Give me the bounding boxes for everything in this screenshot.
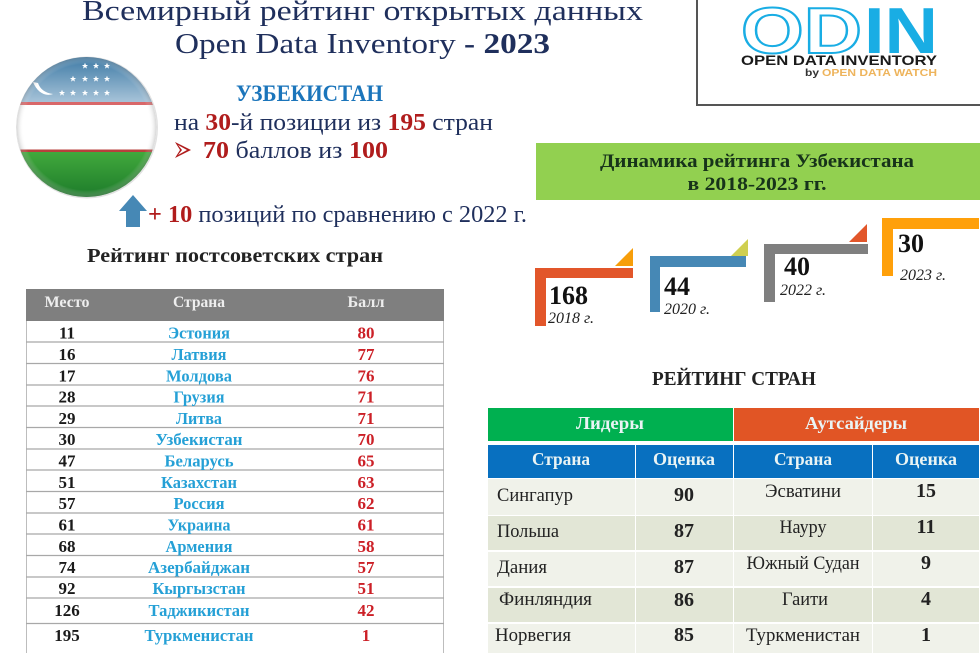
logo: ODIN: OPEN DATA INVENTORY (741, 53, 937, 68)
logo: ODIN: by (805, 68, 820, 79)
row: Норвегия / Туркменистан: Норвегия (495, 626, 571, 646)
header: outsiders (734, 408, 979, 441)
row: Казахстан: 51 (58, 473, 76, 492)
row: Эстония: 11 (59, 324, 75, 342)
step: 2018 (535, 248, 633, 327)
row: Дания / Южный Судан: Дания (497, 558, 547, 578)
icon: up arrow (119, 195, 147, 227)
row: Узбекистан: 70 (358, 430, 374, 449)
row: Таджикистан: 126 (54, 601, 80, 620)
step: 2022: 40 (784, 252, 810, 281)
panel: dynamics banner: в 2018-2023 гг. (688, 174, 826, 195)
row: Россия: 62 (358, 494, 374, 513)
row: Кыргызстан: 51 (358, 579, 374, 598)
table header: Балл (348, 294, 385, 311)
row: Армения: 68 (58, 537, 76, 556)
country heading: УЗБЕКИСТАН (236, 81, 383, 106)
row: Узбекистан: Узбекистан (156, 430, 243, 449)
header: leaders (488, 408, 733, 441)
table header: Место (44, 294, 90, 311)
row: Польша / Науру: 87 (674, 520, 694, 542)
row: Туркменистан (54, 626, 370, 645)
row: Финляндия / Гаити: Гаити (782, 590, 828, 610)
row: Эстония: 80 (358, 324, 374, 342)
row: Литва: 29 (58, 409, 76, 428)
row: Туркменистан: Туркменистан (144, 626, 254, 645)
row: Беларусь: 65 (358, 452, 374, 470)
row: Армения (58, 537, 374, 556)
row: Латвия: 16 (58, 345, 76, 364)
row: Азербайджан: Азербайджан (148, 558, 251, 577)
row: Таджикистан: 42 (358, 601, 374, 620)
row: Латвия: 77 (358, 345, 375, 364)
row: Норвегия / Туркменистан: 1 (921, 624, 931, 646)
row: Молдова: 17 (58, 366, 76, 386)
row: Грузия: 28 (58, 388, 76, 406)
row: Сингапур / Эсватини: 15 (916, 480, 936, 502)
step: 2018: 2018 г. (548, 310, 594, 327)
step: 2020: 2020 г. (664, 301, 710, 318)
row: Норвегия / Туркменистан: Туркменистан (746, 626, 860, 646)
row: Россия: Россия (174, 494, 225, 513)
row: Украина: 61 (358, 516, 374, 534)
header: leaders: Лидеры (576, 413, 644, 433)
row: Украина (58, 516, 374, 534)
row: Казахстан: Казахстан (161, 473, 237, 492)
row: Латвия (58, 345, 375, 364)
row: Грузия: 71 (358, 388, 374, 406)
row: Армения: 58 (358, 537, 374, 556)
row: Россия (58, 494, 374, 513)
header: outsiders: Аутсайдеры (805, 413, 907, 433)
table: leaders and outsiders (488, 408, 979, 653)
row: Польша / Науру: 11 (917, 516, 935, 538)
step: 2018: 168 (549, 281, 588, 310)
row: Дания / Южный Судан: Южный Судан (746, 554, 860, 574)
row: Азербайджан: 57 (358, 558, 375, 577)
row: Дания / Южный Судан (488, 552, 979, 586)
score text: 70 баллов из 100 (203, 138, 388, 164)
header: columns (488, 445, 979, 478)
row: Норвегия / Туркменистан: 85 (674, 624, 694, 646)
table header (26, 289, 444, 321)
row: Норвегия / Туркменистан (488, 624, 979, 653)
row: Туркменистан: 195 (54, 626, 80, 645)
row: Финляндия / Гаити: 86 (674, 589, 694, 611)
heading: country ranking: РЕЙТИНГ СТРАН (652, 368, 816, 390)
row: Сингапур / Эсватини (488, 479, 979, 515)
panel: dynamics banner (536, 143, 980, 200)
change text: + 10 позиций по сравнению с 2022 г. (148, 202, 527, 228)
row: Казахстан (58, 473, 374, 492)
row: Таджикистан (54, 601, 374, 620)
row: Армения: Армения (166, 537, 233, 556)
row: Россия: 57 (58, 494, 76, 513)
heading: post-Soviet ranking: Рейтинг постсоветских стран (87, 245, 383, 267)
row: Таджикистан: Таджикистан (148, 601, 250, 620)
row: Литва: Литва (176, 409, 222, 428)
row: Кыргызстан (58, 579, 374, 598)
step: 2020: 44 (664, 272, 690, 301)
row: Азербайджан: 74 (58, 558, 76, 577)
row: Финляндия / Гаити (488, 588, 979, 622)
row: Финляндия / Гаити: 4 (921, 588, 931, 610)
header: columns: Оценка (895, 449, 957, 469)
title: Open Data Inventory - 2023 (175, 28, 550, 60)
panel: dynamics banner: Динамика рейтинга Узбекистана (600, 151, 915, 172)
header: columns: Страна (774, 449, 832, 469)
row: Литва (58, 409, 374, 428)
row: Польша / Науру (488, 516, 979, 550)
row: Кыргызстан: Кыргызстан (152, 579, 246, 598)
header: columns: Страна (532, 449, 590, 469)
row: Дания / Южный Судан: 87 (674, 556, 694, 578)
position text: на 30-й позиции из 195 стран (174, 110, 493, 136)
row: Сингапур / Эсватини: Эсватини (765, 482, 841, 502)
row: Беларусь: Беларусь (164, 452, 234, 470)
row: Грузия (58, 388, 374, 406)
title (82, 0, 644, 60)
row: Эстония (59, 324, 374, 342)
row: Узбекистан: 30 (58, 430, 76, 449)
row: Грузия: Грузия (174, 388, 225, 406)
row: Украина: 61 (58, 516, 76, 534)
step: 2022 (764, 224, 868, 302)
step: 2020 (650, 239, 748, 318)
icon: Uzbekistan flag sphere (16, 56, 158, 198)
row: Беларусь: 47 (58, 452, 76, 470)
step: 2023: 30 (898, 229, 924, 258)
row: Кыргызстан: 92 (58, 579, 76, 598)
logo: ODIN (697, 0, 980, 105)
row: Сингапур / Эсватини: 90 (674, 484, 694, 506)
row: Сингапур / Эсватини: Сингапур (497, 486, 573, 506)
row: Украина: Украина (168, 516, 230, 534)
row: Молдова: 76 (358, 366, 374, 386)
row: Беларусь (58, 452, 374, 470)
row: Финляндия / Гаити: Финляндия (499, 590, 592, 610)
row: Азербайджан (58, 558, 375, 577)
row: Латвия: Латвия (172, 345, 227, 364)
row: Молдова: Молдова (166, 366, 232, 386)
row: Эстония: Эстония (168, 324, 230, 342)
row: Литва: 71 (358, 409, 374, 428)
row: Казахстан: 63 (358, 473, 374, 492)
logo: ODIN: OPEN DATA WATCH (822, 68, 937, 79)
step: 2022: 2022 г. (780, 282, 826, 299)
step: 2023 (882, 218, 979, 284)
step: 2023: 2023 г. (900, 267, 946, 284)
row: Узбекистан (58, 430, 374, 449)
row: Польша / Науру: Польша (497, 522, 559, 542)
row: Дания / Южный Судан: 9 (921, 552, 931, 574)
row: Польша / Науру: Науру (780, 518, 827, 538)
table: post-Soviet countries (26, 289, 444, 653)
row: Молдова (58, 366, 374, 386)
header: columns: Оценка (653, 449, 715, 469)
table header: Страна (173, 294, 225, 311)
row: Туркменистан: 1 (362, 626, 370, 645)
